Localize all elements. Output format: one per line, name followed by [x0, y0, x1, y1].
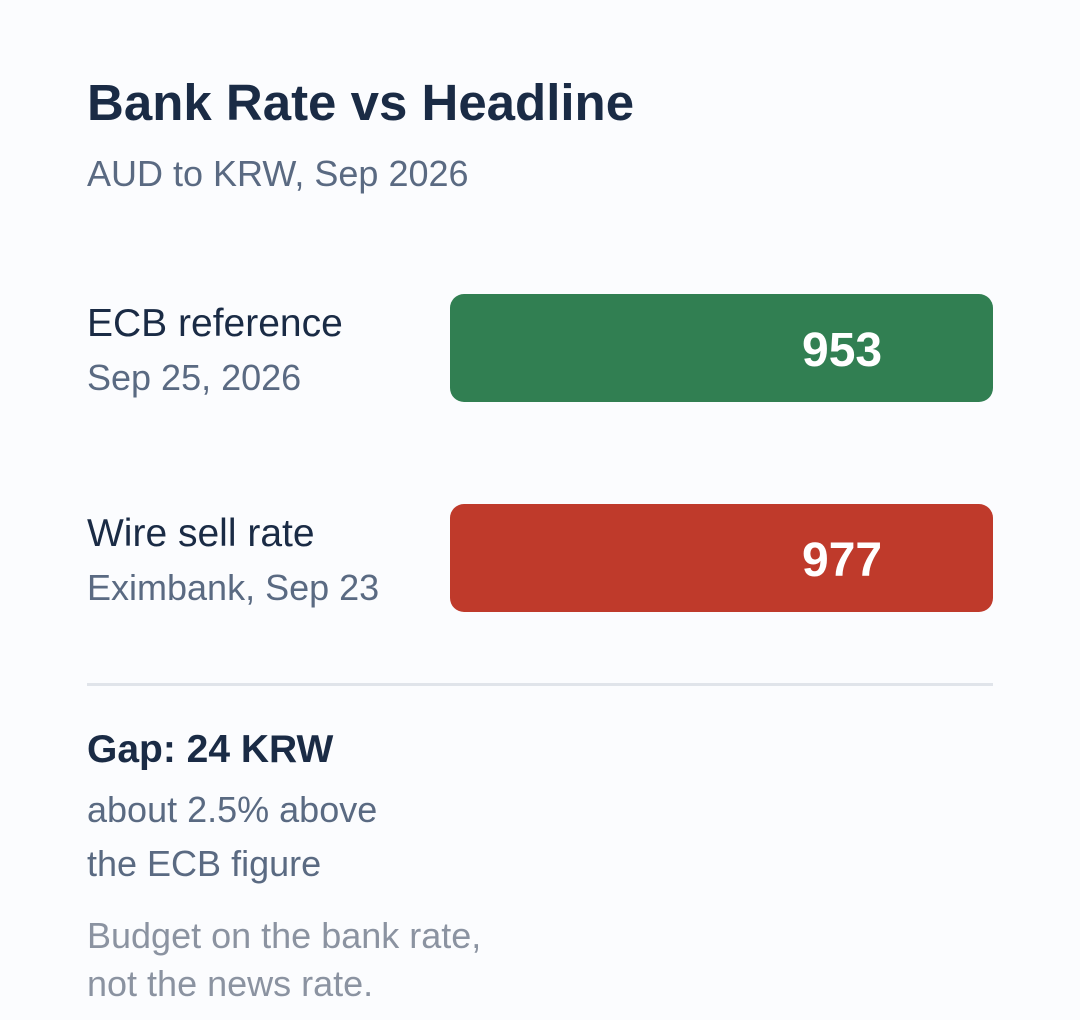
advice note: Budget on the bank rate,	[87, 915, 481, 956]
bar: ECB reference 953: 953	[802, 324, 882, 377]
sublabel: ECB date: Sep 25, 2026	[87, 357, 301, 398]
advice note	[87, 915, 481, 1004]
label: Wire sell rate: Wire sell rate	[87, 512, 315, 555]
gap explanation	[87, 789, 377, 884]
gap explanation: about 2.5% above	[87, 789, 377, 830]
gap explanation: the ECB figure	[87, 843, 321, 884]
advice note: not the news rate.	[87, 963, 373, 1004]
title: Bank Rate vs Headline	[87, 74, 634, 131]
sublabel: Eximbank date: Eximbank, Sep 23	[87, 567, 379, 608]
label: ECB reference: ECB reference	[87, 302, 343, 345]
bar: Wire sell rate 977	[450, 504, 993, 612]
bar: ECB reference 953	[450, 294, 993, 402]
gap heading: Gap: 24 KRW	[87, 728, 333, 771]
subtitle: AUD to KRW, Sep 2026	[87, 153, 469, 194]
bar: Wire sell rate 977: 977	[802, 534, 882, 587]
